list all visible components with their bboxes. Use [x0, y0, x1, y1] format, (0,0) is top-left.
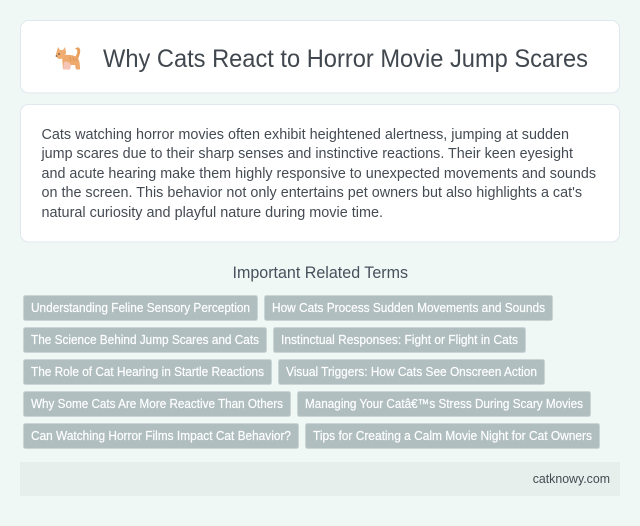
tag 10 [306, 424, 600, 448]
text block: description paragraph: and acute hearing make them highly responsive to unexpected movements and sounds [42, 165, 596, 182]
tag 9 [24, 424, 298, 448]
tag 10: Tips for Creating a Calm Movie Night for Cat Owners [313, 429, 592, 443]
text block: description paragraph: Cats watching horror movies often exhibit heightened alertness, jumping at sudden [42, 126, 569, 143]
tag 4: Instinctual Responses: Fight or Flight in Cats [281, 333, 518, 347]
tag 6 [278, 360, 544, 384]
panel: related term tags [24, 296, 600, 448]
text block: description paragraph: on the screen. This behavior not only entertains pet owners but also highlights a cat's [42, 184, 582, 201]
panel: footer [20, 462, 620, 496]
tag 1: Understanding Feline Sensory Perception [31, 301, 250, 315]
text block: description paragraph: natural curiosity and playful nature during movie time. [42, 204, 383, 221]
text block: description paragraph: jump scares due to their sharp senses and instinctive reactions. Their keen eyesight [41, 145, 574, 162]
tag 6: Visual Triggers: How Cats See Onscreen Action [286, 365, 537, 379]
tag 2: How Cats Process Sudden Movements and Sounds [272, 301, 545, 315]
tag 3 [24, 328, 266, 352]
text block: description paragraph [41, 126, 596, 221]
panel: description [20, 104, 620, 242]
tag 8: Managing Your Catâ€™s Stress During Scary Movies [305, 397, 583, 411]
heading: important related terms: Important Related Terms [232, 264, 408, 282]
tag 4 [274, 328, 526, 352]
tag 5: The Role of Cat Hearing in Startle Reactions [31, 365, 264, 379]
tag 3: The Science Behind Jump Scares and Cats [31, 333, 259, 347]
title: Why Cats React to Horror Movie Jump Scares [103, 45, 588, 73]
panel: title header [20, 20, 620, 93]
tag 8 [298, 392, 590, 416]
footer source text: catknowy.com [533, 471, 610, 486]
tag 1 [24, 296, 258, 320]
tag 7: Why Some Cats Are More Reactive Than Others [31, 397, 283, 411]
tag 7 [24, 392, 290, 416]
tag 5 [24, 360, 272, 384]
icon: cat [56, 47, 80, 70]
tag 2 [264, 296, 552, 320]
tag 9: Can Watching Horror Films Impact Cat Behavior? [31, 429, 291, 443]
